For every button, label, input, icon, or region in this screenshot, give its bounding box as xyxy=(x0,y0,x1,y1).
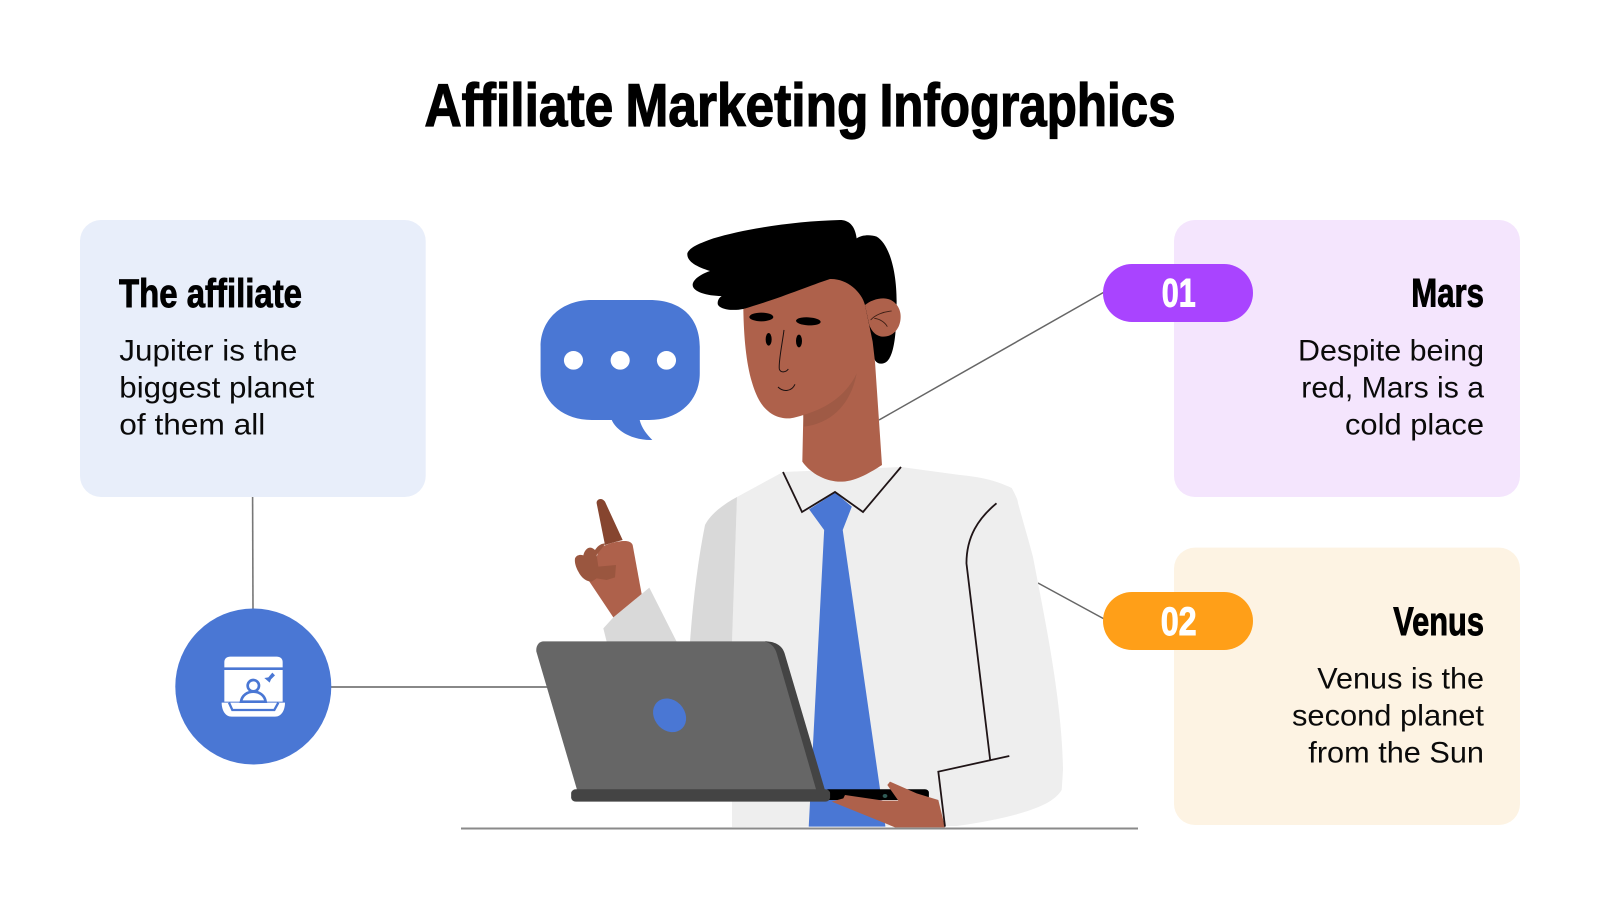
text: venus description xyxy=(1292,662,1485,770)
text: the affiliate description: biggest planet xyxy=(119,372,315,404)
text: the affiliate description xyxy=(119,334,315,442)
text: mars description xyxy=(1298,334,1484,442)
ground line xyxy=(461,828,1138,830)
connector: circle to laptop xyxy=(330,686,550,688)
text: mars description: red, Mars is a xyxy=(1301,372,1484,404)
panel: the affiliate xyxy=(80,220,426,497)
collar xyxy=(783,467,901,512)
text: mars description: Despite being xyxy=(1298,334,1484,367)
badge: 01: 01 xyxy=(1162,272,1196,316)
panel: venus xyxy=(1103,548,1520,825)
shirt seams xyxy=(966,503,996,760)
title: Marketing xyxy=(626,72,868,139)
necktie xyxy=(809,493,885,827)
text: the affiliate description: Jupiter is the xyxy=(119,334,297,367)
connector: affiliate card to circle xyxy=(252,497,254,612)
badge: 01 xyxy=(1103,264,1253,322)
text: mars description: cold place xyxy=(1345,409,1484,442)
hand holding laptop xyxy=(832,756,1009,827)
panel: mars xyxy=(1103,220,1520,497)
heading: venus: Venus xyxy=(1393,600,1484,644)
text: venus description: Venus is the xyxy=(1317,662,1484,695)
title: Affiliate xyxy=(424,72,613,139)
head and neck xyxy=(687,220,901,482)
left sleeve xyxy=(603,588,677,642)
title xyxy=(424,72,1176,139)
icon: blue circle with laptop user xyxy=(175,608,331,764)
connector: 02 pill to person xyxy=(1038,583,1106,620)
text: venus description: from the Sun xyxy=(1308,737,1484,770)
title: Infographics xyxy=(880,72,1176,139)
heading: mars: Mars xyxy=(1411,272,1484,316)
badge: 02: 02 xyxy=(1161,600,1197,644)
text: the affiliate description: of them all xyxy=(119,409,265,442)
connector: 01 pill to person xyxy=(879,291,1106,420)
badge: 02 xyxy=(1103,592,1253,650)
laptop xyxy=(536,641,929,802)
raised hand xyxy=(575,499,642,617)
shirt xyxy=(690,467,1063,827)
speech bubble xyxy=(541,300,700,440)
person illustration xyxy=(536,220,1063,827)
text: venus description: second planet xyxy=(1292,700,1485,732)
heading: the affiliate: The affiliate xyxy=(119,272,302,316)
